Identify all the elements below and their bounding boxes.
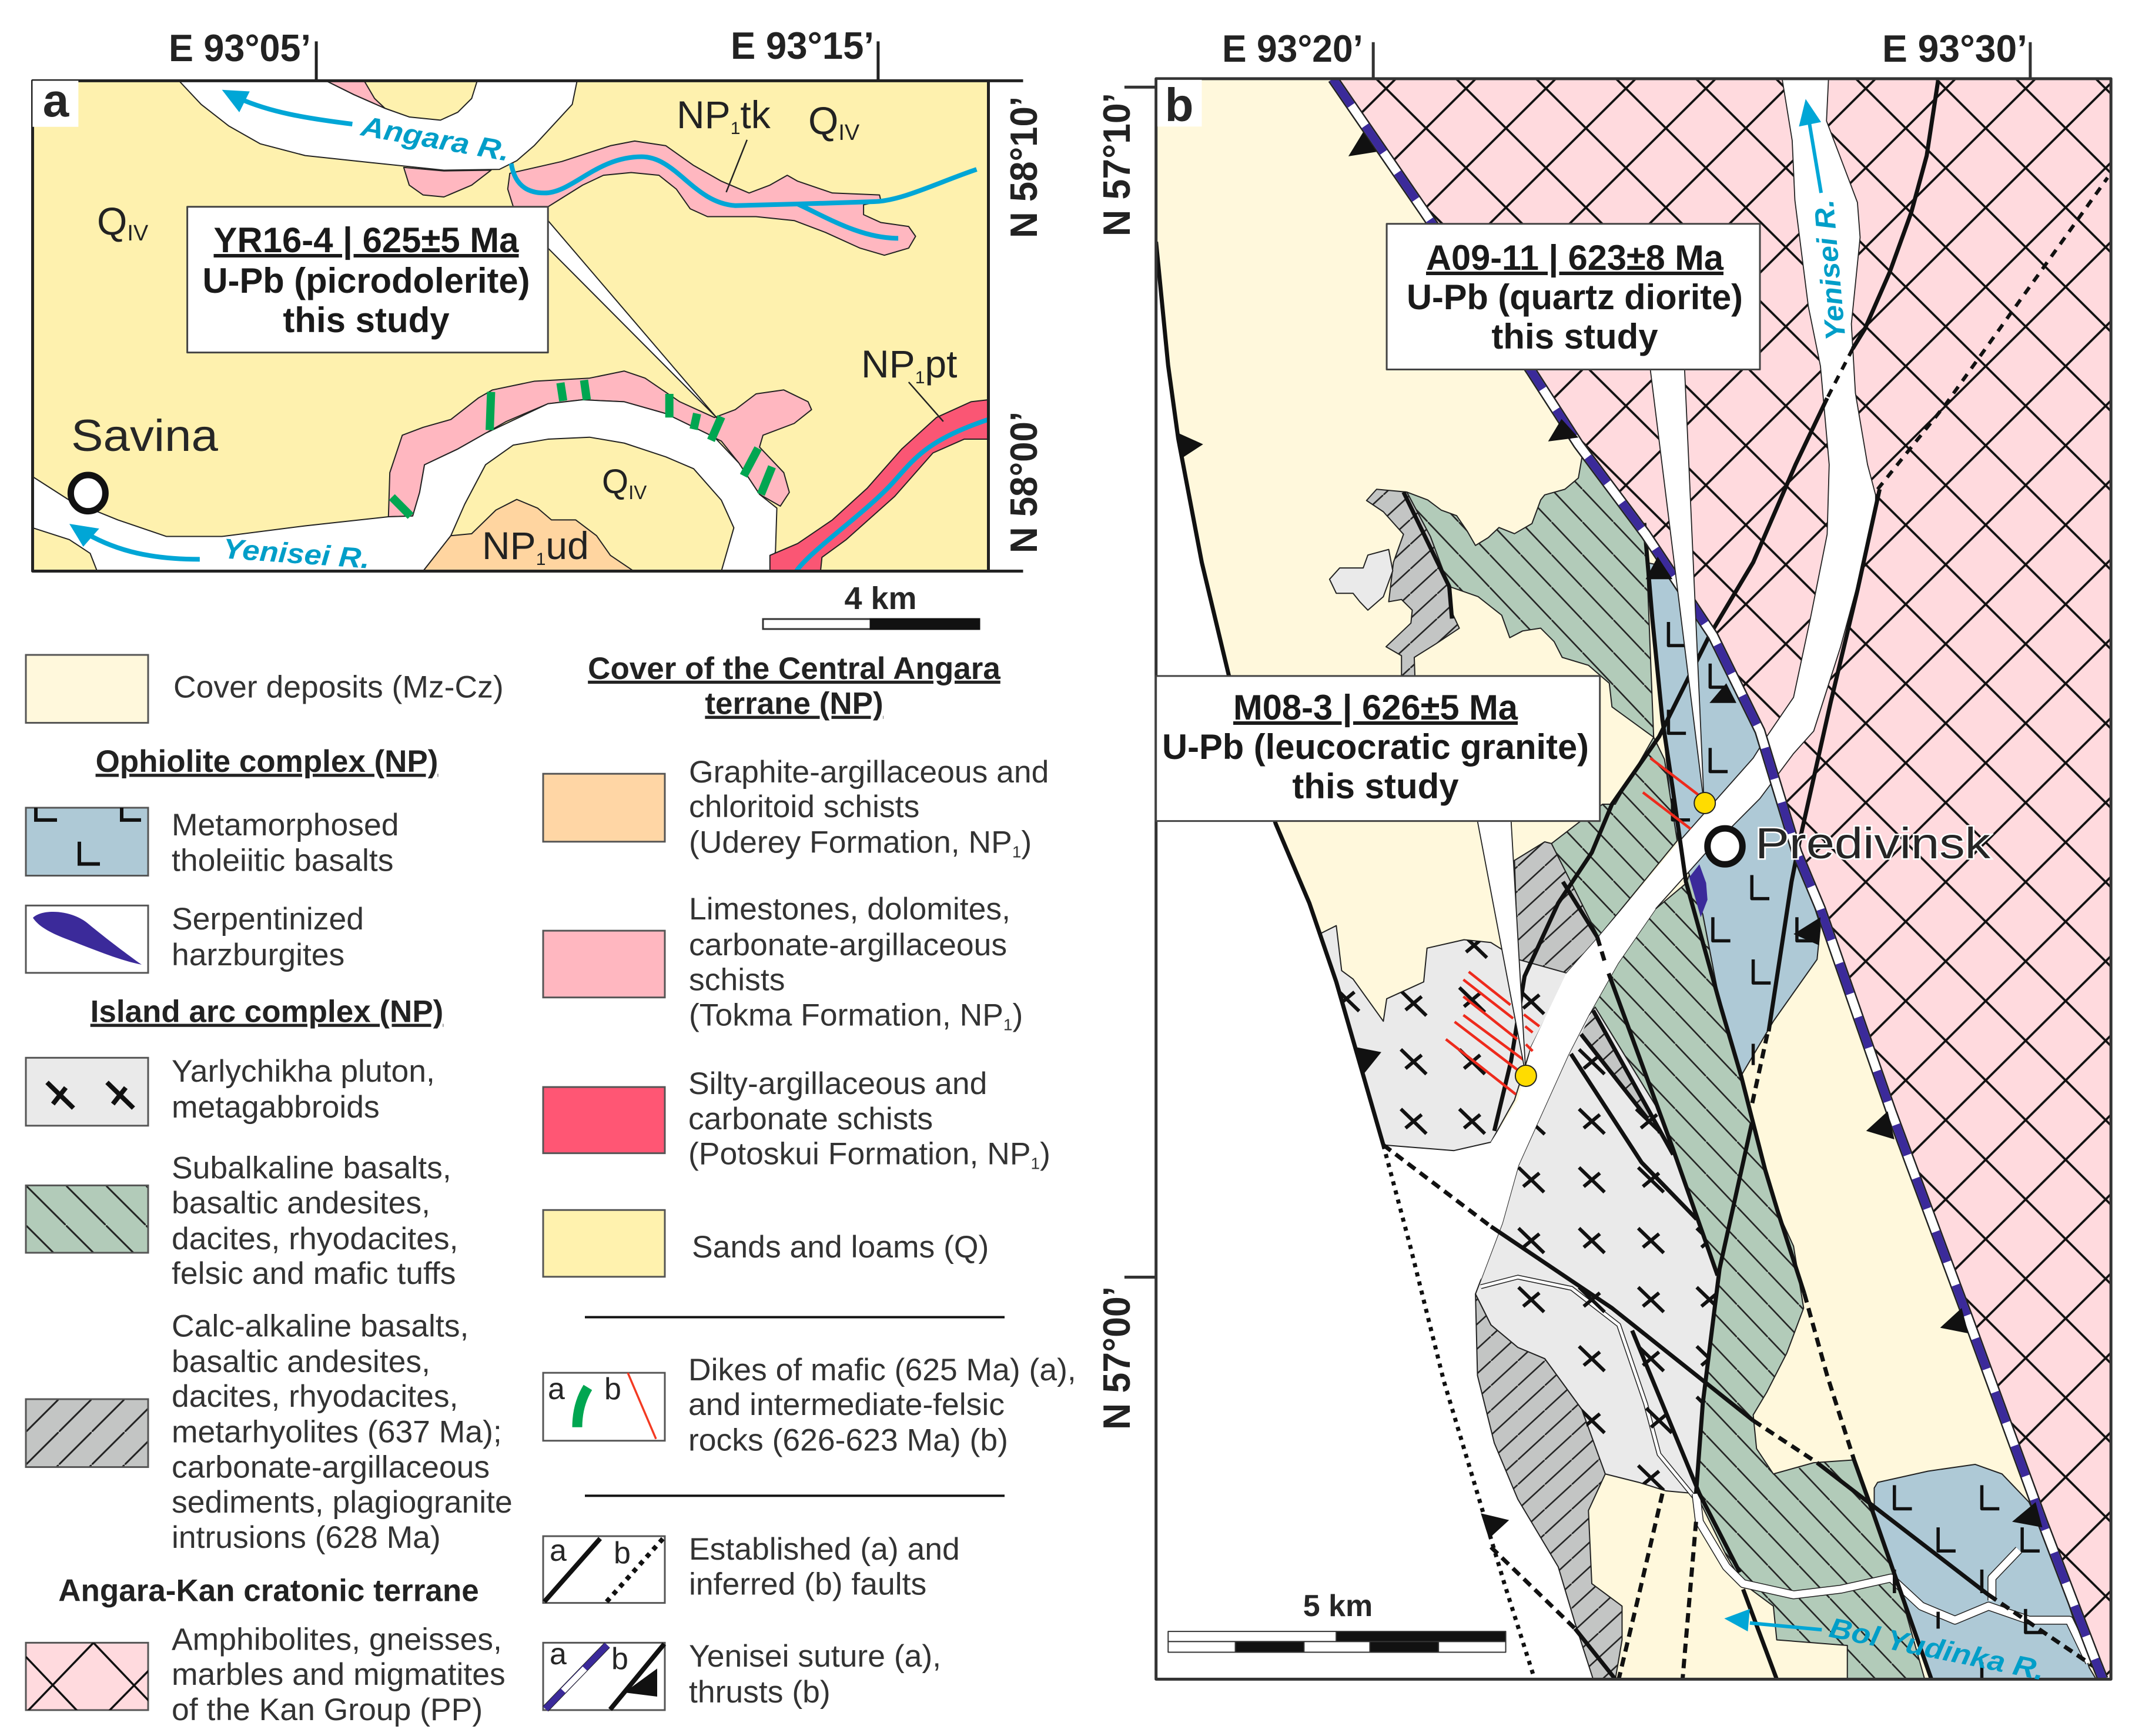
map unit labels: Q xyxy=(97,199,127,243)
map unit labels xyxy=(97,93,957,569)
mafic dikes xyxy=(392,380,772,516)
label: suture and thrust: Yenisei suture (a), xyxy=(689,1639,941,1674)
label: Uderey formation: Graphite-argillaceous and xyxy=(689,755,1049,790)
serpentinite body xyxy=(1689,864,1708,917)
scale bar 4 km xyxy=(763,581,979,629)
Kan Group terrane xyxy=(1333,79,2111,1679)
label: subalkaline basalts: felsic and mafic tuffs xyxy=(172,1256,456,1291)
scale bar 4 km: 4 km xyxy=(844,581,917,616)
latitude labels xyxy=(1002,96,1045,553)
callout: M08-3: M08-3 | 626±5 Ma xyxy=(1233,688,1518,728)
label: calc-alkaline basalts: basaltic andesites, xyxy=(172,1344,430,1379)
Savina label: Savina xyxy=(71,411,219,461)
scale label 5 km: 5 km xyxy=(1303,1589,1373,1623)
swatch: cover deposits xyxy=(26,655,148,723)
label: Tokma formation: carbonate-argillaceous xyxy=(689,928,1007,962)
latitude labels: N 58°00’ xyxy=(1002,412,1045,553)
label: Potoskui formation: carbonate schists xyxy=(688,1102,933,1136)
label: calc-alkaline basalts: Calc-alkaline basalts, xyxy=(172,1309,468,1343)
white background xyxy=(1156,79,2111,1679)
label: subalkaline basalts: dacites, rhyodacites, xyxy=(172,1222,458,1256)
callout leader xyxy=(548,220,717,417)
longitude labels: E 93°05’ xyxy=(169,26,311,69)
label: sands and loams: Sands and loams (Q) xyxy=(692,1230,989,1265)
label: Kan Group: marbles and migmatites xyxy=(172,1657,506,1692)
callout: M08-3: this study xyxy=(1292,767,1459,806)
map unit labels: IV xyxy=(838,121,860,145)
Bol Yudinka river xyxy=(1696,1494,2090,1663)
river labels xyxy=(1809,198,2047,1687)
panel letter box xyxy=(32,81,78,127)
river labels: Yenisei R. xyxy=(1809,198,1852,342)
map unit labels: NP xyxy=(677,93,731,136)
label: Tokma formation: schists xyxy=(689,963,785,998)
frame and coordinate ticks xyxy=(32,41,1023,571)
callout: M08-3 xyxy=(1162,688,1589,806)
callout: A09-11: A09-11 | 623±8 Ma xyxy=(1426,238,1724,278)
callout: YR16-4: U-Pb (picrodolerite) xyxy=(202,261,530,300)
sample points xyxy=(1515,792,1715,1086)
heading: Angara-Kan cratonic terrane: Angara-Kan cratonic terrane xyxy=(58,1574,479,1608)
panel letter box xyxy=(1157,80,1201,126)
Angara river xyxy=(179,81,577,170)
longitude labels xyxy=(1222,27,2027,70)
heading: island arc complex: Island arc complex (NP) xyxy=(91,995,443,1029)
dotted fault xyxy=(1383,1145,1535,1679)
swatch: suture and thrust xyxy=(543,1637,665,1710)
map unit labels: pt xyxy=(925,342,957,386)
latitude labels: N 58°10’ xyxy=(1002,96,1045,238)
label: Uderey formation: (Uderey Formation, NP xyxy=(689,825,1032,861)
callout box xyxy=(188,207,548,353)
label: Potoskui formation: 1 xyxy=(1031,1155,1040,1173)
map unit labels: ud xyxy=(545,524,589,567)
label: dikes: Dikes of mafic (625 Ma) (a), xyxy=(688,1353,1076,1387)
label: Tokma formation: 1 xyxy=(1003,1016,1013,1033)
label: Potoskui formation: ) xyxy=(1040,1137,1050,1172)
label: cover deposits: Cover deposits (Mz-Cz) xyxy=(173,670,504,705)
calc-alkaline middle xyxy=(1514,842,1598,974)
heading: cover of the Central Angara terrane: terrane (NP) xyxy=(705,687,883,721)
calc-alkaline strip xyxy=(1581,1011,1673,1155)
swatch: dikes: b xyxy=(604,1372,621,1406)
label: faults: Established (a) and xyxy=(689,1532,960,1567)
swatch: dikes: a xyxy=(548,1372,565,1406)
frame and coordinate ticks xyxy=(1124,42,2111,1679)
label: calc-alkaline basalts: carbonate-argillaceous xyxy=(172,1450,490,1484)
map unit labels: 1 xyxy=(731,119,740,138)
label: Kan Group: of the Kan Group (PP) xyxy=(172,1692,483,1727)
basalts south-east xyxy=(1874,1464,2096,1679)
subalkaline main belt xyxy=(1588,875,1925,1679)
swatch: Kan Group xyxy=(24,1643,159,1715)
intermediate-felsic dikes xyxy=(1446,758,1698,1095)
panel letter a: a xyxy=(43,74,69,126)
longitude labels xyxy=(169,24,874,69)
small pluton islet xyxy=(1330,550,1393,610)
map unit labels: IV xyxy=(628,481,647,503)
Uderey formation outcrop xyxy=(423,500,632,571)
callout: YR16-4: this study xyxy=(283,300,450,340)
label: tholeiitic basalts: Metamorphosed xyxy=(172,808,399,842)
panel a: geological map xyxy=(32,24,1045,629)
subalkaline middle xyxy=(1551,737,1677,937)
swatch: sands and loams xyxy=(543,1210,665,1277)
label: Tokma formation: (Tokma Formation, NP xyxy=(689,998,1023,1033)
dashed faults xyxy=(1827,178,2107,489)
arrow: Bol Yudinka flow xyxy=(1724,1609,1822,1631)
map unit labels: 1 xyxy=(915,368,925,387)
label: subalkaline basalts: Subalkaline basalts, xyxy=(172,1151,451,1185)
label: Potoskui formation: Silty-argillaceous and xyxy=(688,1066,987,1101)
Savina marker xyxy=(71,475,105,511)
label: dikes: rocks (626-623 Ma) (b) xyxy=(688,1423,1008,1458)
Potoskui formation outcrop xyxy=(770,400,989,571)
label: Uderey formation: 1 xyxy=(1012,843,1021,861)
Yenisei river xyxy=(32,400,777,571)
thin stream xyxy=(1481,1277,1696,1499)
area outside cover, west of thrust xyxy=(1156,242,1593,1679)
arrow: Yenisei flow xyxy=(1799,99,1821,193)
callout box M08-3 xyxy=(1156,676,1600,821)
sands and loams background xyxy=(32,81,989,571)
Yarlychikha pluton north-west xyxy=(1320,926,1568,1150)
river banks xyxy=(1656,79,1876,909)
panel b: geological map xyxy=(1095,27,2111,1687)
map unit labels: 1 xyxy=(536,550,545,569)
heading: cover of the Central Angara terrane xyxy=(588,651,1000,721)
river labels xyxy=(222,111,512,575)
callout leader A09-11 xyxy=(1651,369,1704,804)
heading: cover of the Central Angara terrane: Cover of the Central Angara xyxy=(588,651,1000,686)
map unit labels: tk xyxy=(740,93,771,136)
latitude labels: N 57°10’ xyxy=(1095,93,1138,236)
latitude labels xyxy=(1095,93,1138,1430)
longitude labels: E 93°30’ xyxy=(1882,27,2027,70)
label: Uderey formation: ) xyxy=(1021,825,1032,860)
swatch: Tokma formation xyxy=(543,931,665,998)
Yarlychikha pluton central xyxy=(1475,1007,1718,1494)
arrow: Angara flow xyxy=(222,90,352,124)
label: Yarlychikha pluton: Yarlychikha pluton, xyxy=(172,1054,435,1089)
callout: A09-11: U-Pb (quartz diorite) xyxy=(1407,277,1743,317)
map unit labels: Q xyxy=(602,463,628,501)
dashed faults, coarse xyxy=(1383,937,2096,1679)
swatch: calc-alkaline basalts xyxy=(26,1399,148,1467)
swatch: faults: b xyxy=(614,1536,631,1570)
panel letter b: b xyxy=(1165,79,1193,131)
callout leader M08-3 xyxy=(1478,821,1526,1076)
label: calc-alkaline basalts: sediments, plagiogranite xyxy=(172,1485,513,1520)
label: serpentinized harzburgites: harzburgites xyxy=(172,938,344,972)
Predivinsk marker xyxy=(1708,828,1742,864)
blue stream lines xyxy=(511,157,989,571)
label: faults: inferred (b) faults xyxy=(689,1567,926,1602)
swatch: Yarlychikha pluton xyxy=(26,1058,148,1126)
label: Potoskui formation: (Potoskui Formation, NP xyxy=(688,1137,1050,1173)
callout: YR16-4: YR16-4 | 625±5 Ma xyxy=(214,220,519,260)
cover deposits xyxy=(1156,79,2103,1679)
arrow: Yenisei flow xyxy=(69,524,200,559)
label: serpentinized harzburgites: Serpentinized xyxy=(172,902,364,936)
Tokma formation outcrops xyxy=(326,81,916,517)
swatch: Uderey formation xyxy=(543,774,665,842)
subalkaline north xyxy=(1407,447,1654,737)
label: Tokma formation: Limestones, dolomites, xyxy=(689,892,1010,926)
swatch: serpentinized harzburgites xyxy=(26,905,148,973)
callout: A09-11 xyxy=(1407,238,1743,356)
river labels: Yenisei R. xyxy=(222,533,371,575)
callout: YR16-4 xyxy=(202,220,530,340)
callout: A09-11: this study xyxy=(1491,317,1658,356)
heading: ophiolite complex: Ophiolite complex (NP) xyxy=(96,744,438,779)
label: tholeiitic basalts: tholeiitic basalts xyxy=(172,844,394,878)
label: subalkaline basalts: basaltic andesites, xyxy=(172,1186,430,1220)
calc-alkaline north xyxy=(1367,489,1460,680)
label: Yarlychikha pluton: metagabbroids xyxy=(172,1090,380,1125)
label: calc-alkaline basalts: dacites, rhyodacites, xyxy=(172,1379,458,1414)
map unit labels: NP xyxy=(861,342,915,386)
legend xyxy=(24,651,1076,1727)
Yenisei suture xyxy=(1333,79,2103,1679)
longitude labels: E 93°15’ xyxy=(731,24,874,67)
swatch: faults: a xyxy=(550,1533,567,1567)
river labels: Angara R. xyxy=(358,111,512,168)
swatch: suture and thrust: b xyxy=(611,1641,628,1675)
swatch: dikes xyxy=(543,1372,665,1441)
scale bar 5 km xyxy=(1168,1631,1506,1652)
label: dikes: and intermediate-felsic xyxy=(688,1387,1005,1422)
latitude labels: N 57°00’ xyxy=(1095,1286,1138,1430)
label: Uderey formation: chloritoid schists xyxy=(689,790,919,824)
swatch: faults xyxy=(543,1533,665,1603)
swatch: suture and thrust: a xyxy=(550,1637,567,1671)
map unit labels: NP xyxy=(482,524,536,567)
callout: M08-3: U-Pb (leucocratic granite) xyxy=(1162,727,1589,767)
swatch: Potoskui formation xyxy=(543,1087,665,1153)
unit leader lines xyxy=(726,140,943,422)
label: calc-alkaline basalts: intrusions (628 Ma) xyxy=(172,1520,441,1555)
callout box A09-11 xyxy=(1387,224,1760,369)
label: calc-alkaline basalts: metarhyolites (637 Ma); xyxy=(172,1415,502,1450)
map unit labels: IV xyxy=(127,221,149,246)
basalts north xyxy=(1646,563,1820,1076)
swatch: tholeiitic basalts xyxy=(26,804,148,876)
label: Tokma formation: ) xyxy=(1013,998,1023,1032)
swatch: subalkaline basalts xyxy=(26,1185,148,1253)
map unit labels: Q xyxy=(808,99,838,142)
Predivinsk label: Predivinsk xyxy=(1755,819,1991,868)
longitude labels: E 93°20’ xyxy=(1222,27,1363,70)
label: suture and thrust: thrusts (b) xyxy=(689,1675,831,1710)
Yenisei river xyxy=(1481,79,1876,1280)
river labels: Bol Yudinka R. xyxy=(1827,1613,2047,1687)
solid faults xyxy=(1156,81,1989,1679)
pluton symbols xyxy=(1334,933,1722,1490)
calc-alkaline south xyxy=(1475,1294,1622,1679)
label: Kan Group: Amphibolites, gneisses, xyxy=(172,1622,502,1657)
thrust teeth xyxy=(1178,132,2042,1538)
basalt symbols xyxy=(1668,622,2043,1684)
